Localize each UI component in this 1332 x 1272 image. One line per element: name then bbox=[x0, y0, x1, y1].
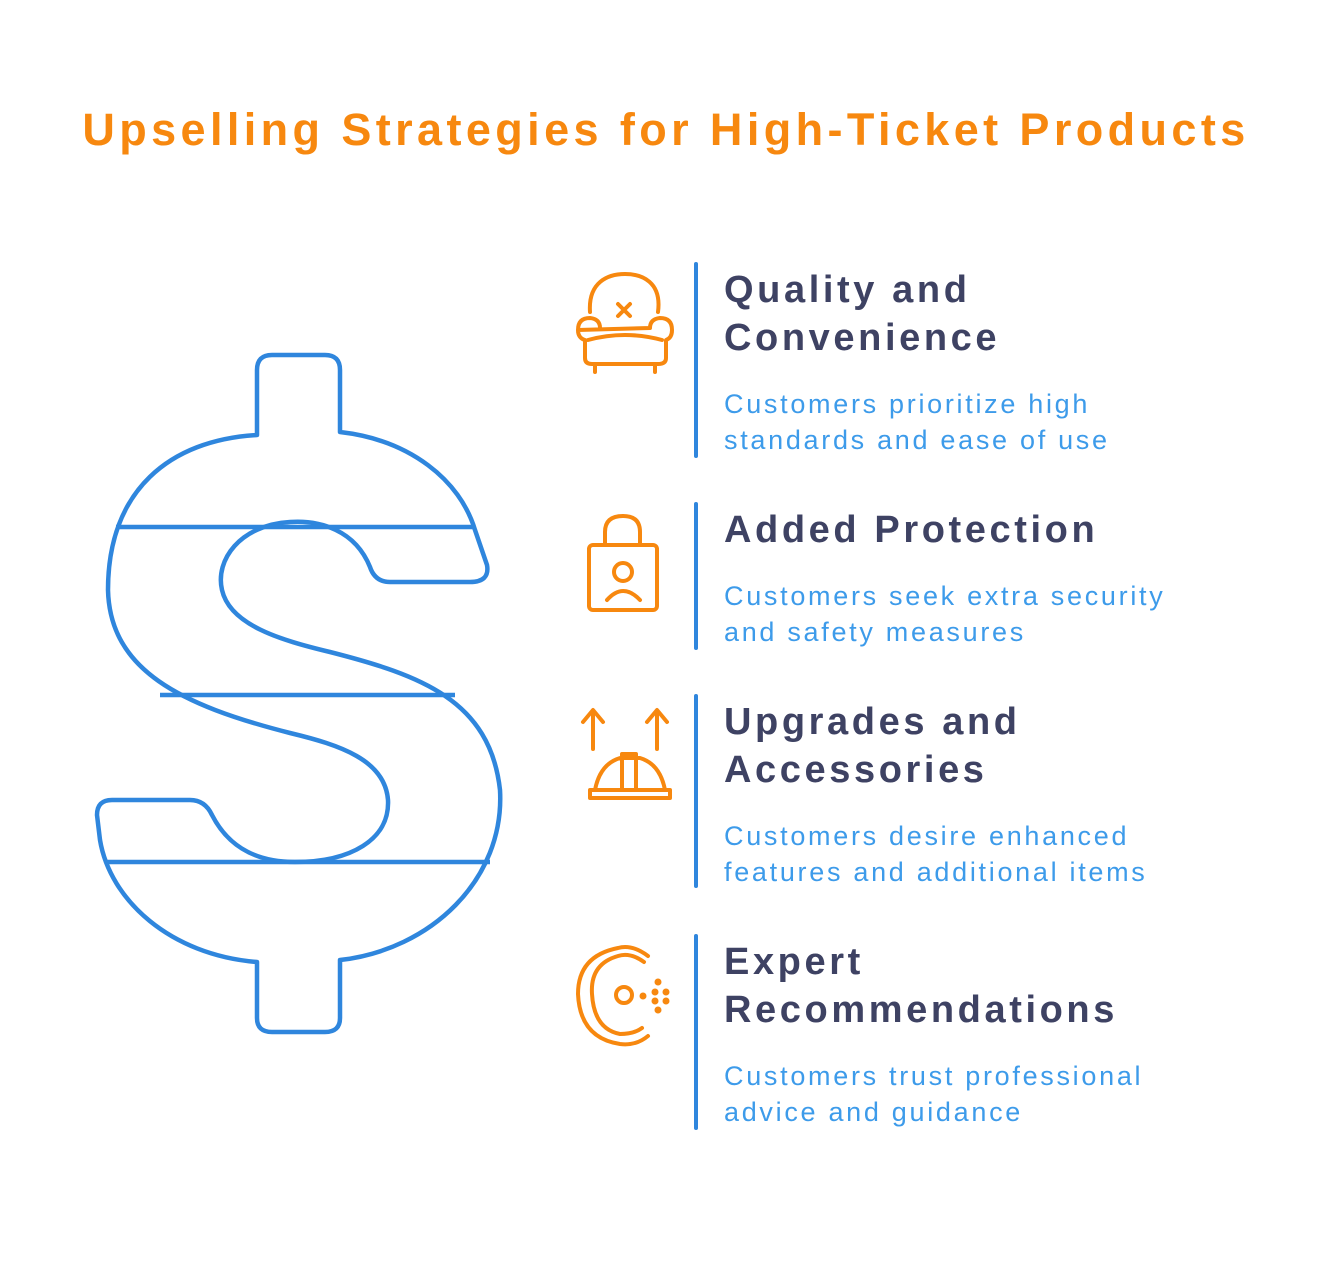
heading: Upgrades and bbox=[724, 701, 1021, 743]
heading: Recommendations bbox=[724, 989, 1118, 1031]
heading bbox=[724, 941, 1118, 1031]
heading bbox=[724, 701, 1021, 791]
heading: Convenience bbox=[724, 317, 1000, 359]
description bbox=[724, 389, 1110, 455]
item: added protection bbox=[587, 502, 1165, 650]
heading: Accessories bbox=[724, 749, 988, 791]
description bbox=[724, 821, 1148, 887]
vertical line bbox=[694, 934, 698, 1130]
icon: armchair bbox=[576, 272, 674, 374]
vertical line bbox=[694, 502, 698, 650]
heading: Quality and bbox=[724, 269, 971, 311]
description: Customers desire enhanced bbox=[724, 821, 1129, 851]
description: and safety measures bbox=[724, 617, 1026, 647]
icon: padlock bbox=[587, 514, 659, 612]
title: Upselling Strategies for High-Ticket Products bbox=[82, 104, 1250, 155]
vertical line bbox=[694, 262, 698, 458]
description: standards and ease of use bbox=[724, 425, 1110, 455]
description: Customers prioritize high bbox=[724, 389, 1090, 419]
description bbox=[724, 1061, 1143, 1127]
heading: Added Protection bbox=[724, 509, 1098, 551]
description bbox=[724, 581, 1165, 647]
item: quality and convenience bbox=[576, 262, 1110, 458]
description: Customers seek extra security bbox=[724, 581, 1165, 611]
vertical line bbox=[694, 694, 698, 888]
description: advice and guidance bbox=[724, 1097, 1023, 1127]
icon: C with dots bbox=[576, 945, 670, 1046]
description: Customers trust professional bbox=[724, 1061, 1143, 1091]
description: features and additional items bbox=[724, 857, 1148, 887]
icon: dollar sign bbox=[94, 352, 502, 1034]
item: upgrades and accessories bbox=[580, 694, 1148, 888]
heading bbox=[724, 269, 1000, 359]
heading: Expert bbox=[724, 941, 864, 983]
item: expert recommendations bbox=[576, 934, 1143, 1130]
icon: helmet with arrows bbox=[580, 708, 672, 800]
